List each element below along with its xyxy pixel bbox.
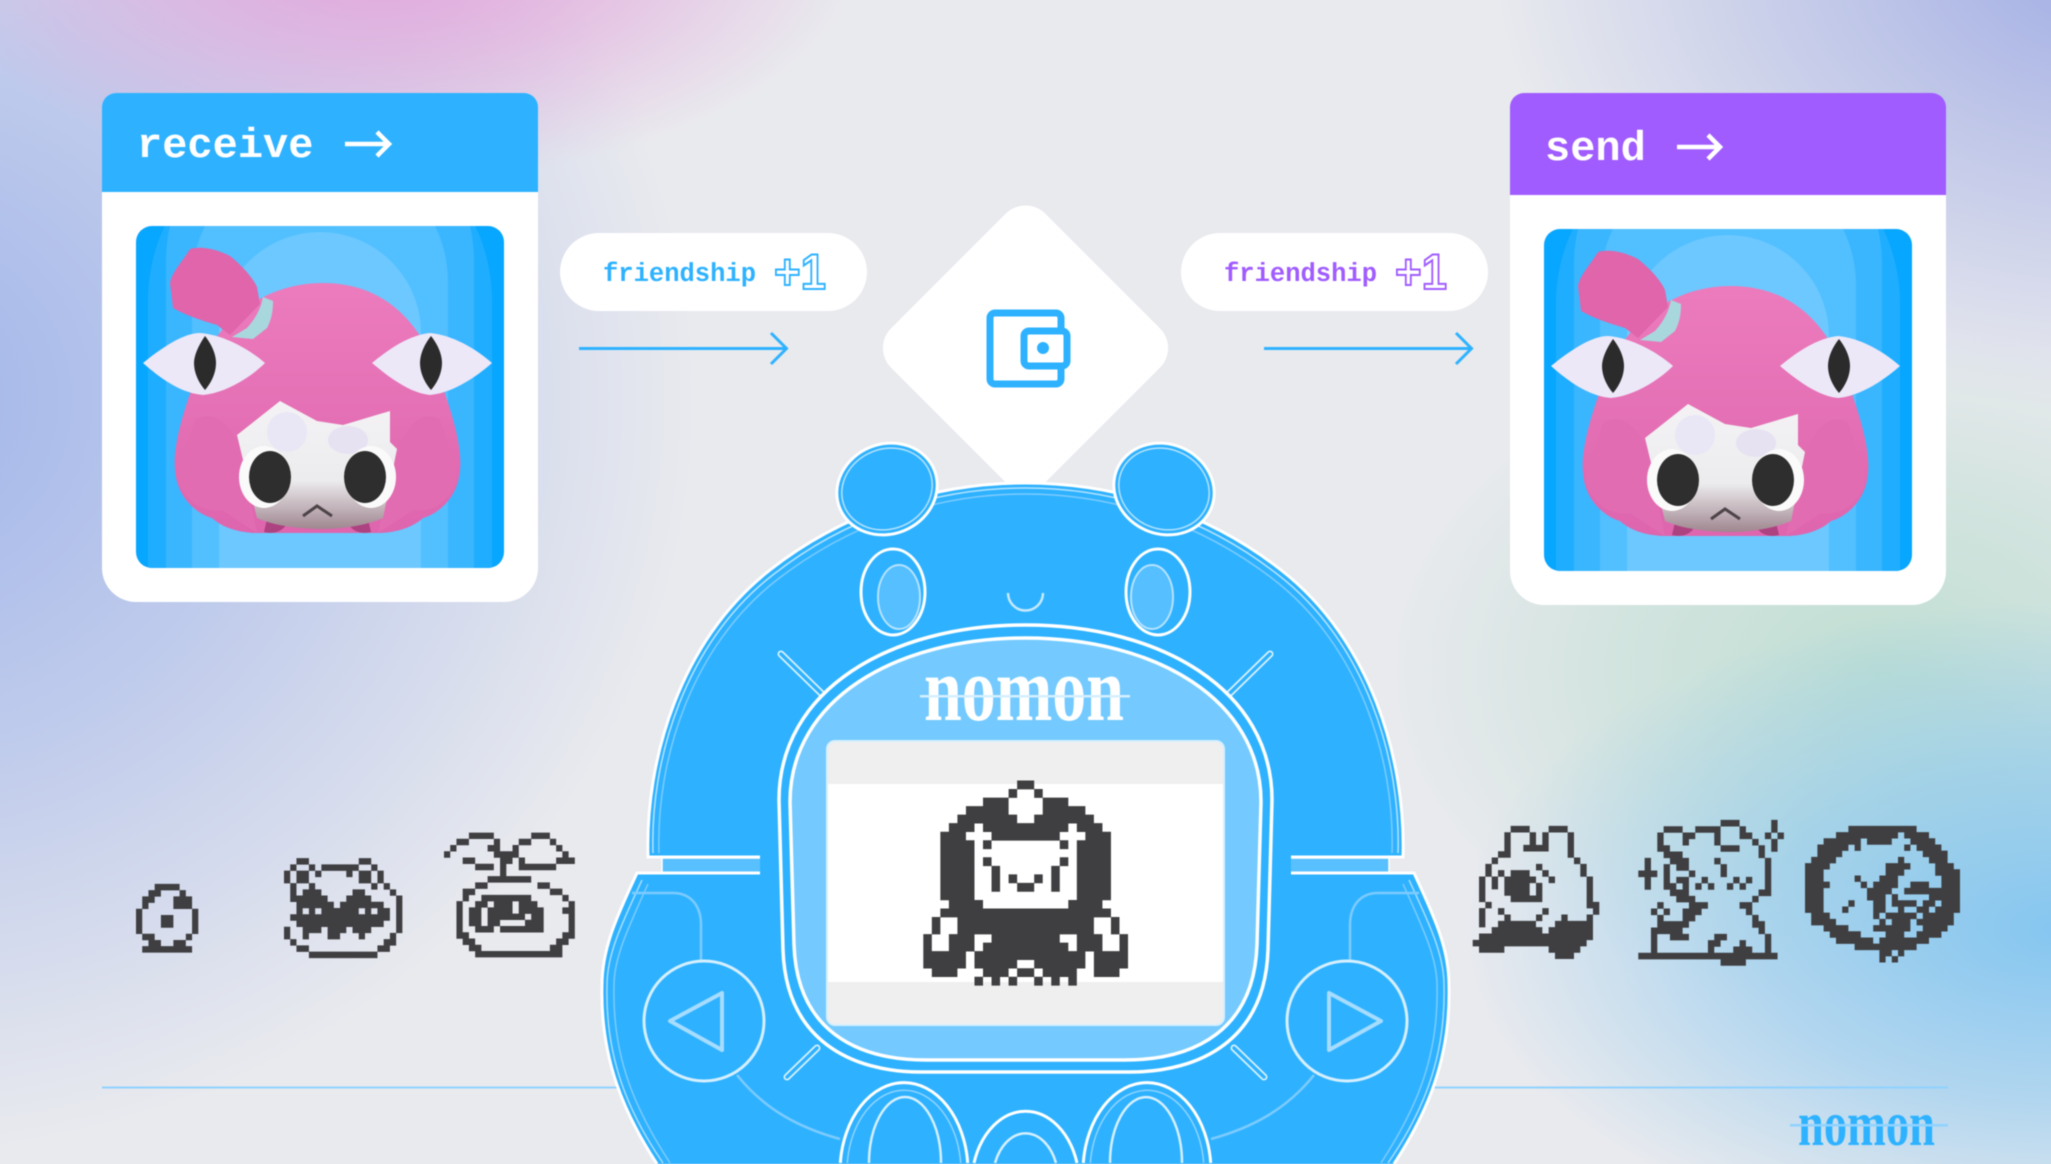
receive header bar bbox=[102, 93, 538, 192]
pill: friendship +1 blue bbox=[560, 233, 867, 311]
sprite: egg bbox=[136, 887, 198, 949]
bottom button middle bbox=[974, 1111, 1077, 1163]
arrow: right flow bbox=[1264, 333, 1472, 364]
panel: send card bbox=[1510, 93, 1946, 605]
send avatar image bbox=[1544, 110, 1912, 571]
device lower shell bbox=[602, 873, 1449, 1164]
pill: friendship +1 blue: friendship bbox=[603, 260, 756, 289]
sprite: sparkle creature bbox=[1638, 823, 1784, 962]
left ear bbox=[823, 428, 951, 550]
sprite: main pet on screen bbox=[923, 785, 1128, 981]
device neck band bbox=[662, 858, 1389, 874]
screen bbox=[827, 741, 1224, 1025]
send arrow bbox=[1677, 135, 1720, 159]
bottom button left bbox=[840, 1083, 968, 1163]
bottom button right bbox=[1083, 1083, 1211, 1163]
bezel outer bbox=[779, 625, 1272, 1072]
right ear bbox=[1100, 428, 1228, 550]
device: tamagotchi toy bbox=[602, 428, 1449, 1164]
right eye oval bbox=[1126, 549, 1190, 635]
arrow: left flow bbox=[579, 333, 786, 364]
sprite: frog bbox=[284, 861, 402, 955]
device upper shell bbox=[648, 483, 1403, 857]
icon: wallet bbox=[990, 313, 1067, 384]
pill: friendship +1 purple: +1 bbox=[1395, 244, 1447, 300]
receive avatar image bbox=[136, 107, 504, 568]
right button bbox=[1287, 961, 1407, 1081]
sprite: ring dragon bbox=[1805, 829, 1960, 959]
receive arrow bbox=[345, 132, 389, 156]
sprite: plant blob bbox=[444, 836, 575, 954]
device body column bbox=[760, 850, 1291, 880]
sprite: rabbit bbox=[1473, 829, 1599, 956]
panel: receive card bbox=[102, 93, 538, 602]
pill: friendship +1 purple: friendship bbox=[1224, 260, 1377, 289]
device smile bbox=[1008, 593, 1043, 610]
bezel inner bbox=[790, 638, 1261, 1060]
diamond: wallet badge bbox=[871, 194, 1180, 502]
receive heading: receive bbox=[137, 122, 313, 170]
send header bar bbox=[1510, 93, 1946, 195]
footer logo: nomon bbox=[1798, 1088, 1935, 1159]
pill: friendship +1 blue: +1 bbox=[774, 244, 826, 300]
pill: friendship +1 purple bbox=[1181, 233, 1488, 311]
tick marks bbox=[781, 654, 1270, 1077]
device logo: nomon bbox=[924, 638, 1124, 740]
left eye oval bbox=[861, 549, 925, 635]
send heading: send bbox=[1545, 125, 1646, 173]
left button bbox=[644, 961, 764, 1081]
footer divider line bbox=[102, 1086, 1948, 1088]
